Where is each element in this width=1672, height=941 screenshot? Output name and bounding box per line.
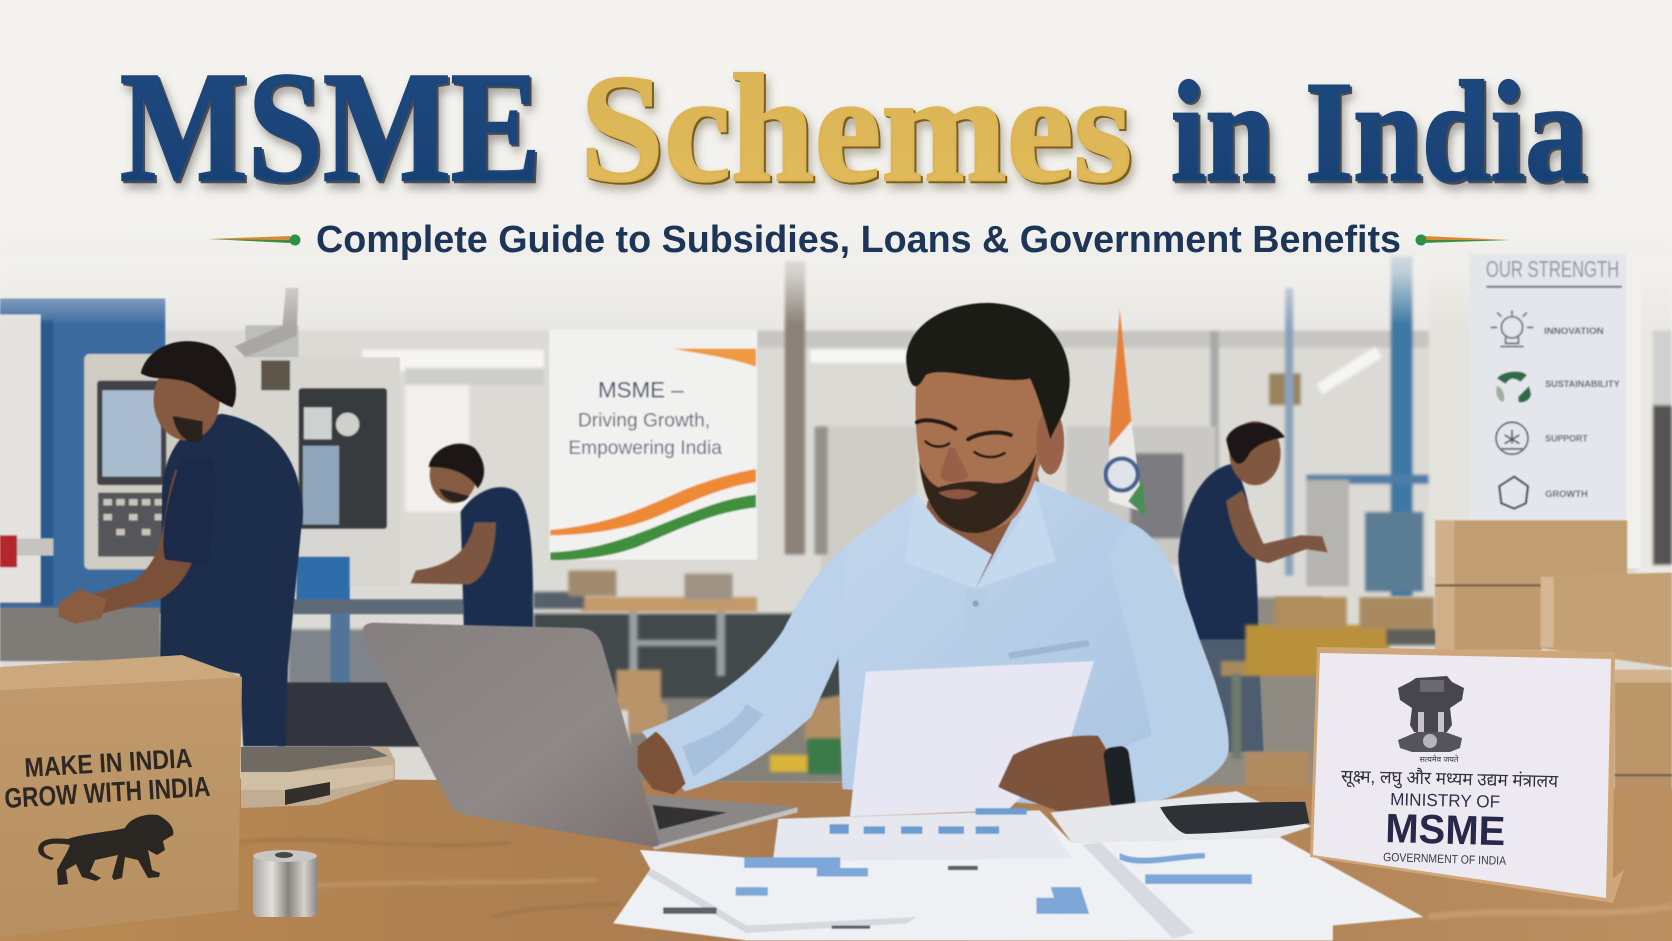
- collar: [904, 480, 1056, 589]
- title word: MSME: MSME: [120, 40, 541, 215]
- metal cylinder: [253, 850, 317, 917]
- shirt placket: [965, 589, 986, 682]
- hair: [906, 303, 1070, 439]
- sleeve shadow: [682, 704, 763, 776]
- title: [120, 40, 1587, 215]
- sign ministry of: MINISTRY OF: [1390, 789, 1500, 812]
- stacked cartons: [1435, 520, 1672, 891]
- banner: our strength: [1469, 254, 1641, 568]
- right tricolour accent: [1416, 234, 1510, 246]
- neck: [917, 469, 1056, 589]
- left machines: [0, 288, 464, 746]
- icon: national emblem: [1398, 676, 1464, 752]
- watch: [1102, 745, 1137, 812]
- desk: [0, 778, 1672, 941]
- banner: driving growth: Empowering India: [568, 438, 722, 459]
- box text line 1: MAKE IN INDIA: [24, 743, 193, 783]
- wood grain: [240, 839, 1672, 917]
- background tables and boxes: [533, 570, 1461, 792]
- box text line 2: GROW WITH INDIA: [4, 771, 211, 814]
- spread of chart papers: [613, 791, 1424, 940]
- torso: [838, 480, 1184, 810]
- left tricolour accent: [208, 234, 300, 246]
- left hand: [638, 731, 686, 794]
- banner: our strength: GROWTH: [1545, 489, 1588, 500]
- title words: in India: in India: [1171, 53, 1587, 212]
- banner: our strength: SUPPORT: [1545, 433, 1588, 444]
- right hand: [998, 735, 1117, 819]
- nose: [941, 448, 968, 482]
- title word: Schemes: Schemes: [580, 44, 1132, 214]
- shirt buttons: [972, 600, 979, 688]
- banner: driving growth: Driving Growth,: [578, 411, 710, 432]
- carton: make in india: [0, 655, 242, 937]
- shirt pocket: [1008, 640, 1090, 659]
- beard: [919, 453, 1036, 533]
- emblem motto: सत्यमेव जयते: [1420, 754, 1459, 764]
- right arm: [1098, 522, 1229, 813]
- pillar: [785, 261, 827, 554]
- laptop: [363, 623, 798, 850]
- icon: sustainability: [1496, 372, 1531, 402]
- icon: lion: [38, 815, 173, 885]
- left arm: [642, 544, 848, 791]
- sign: ministry of msme: [1310, 647, 1624, 903]
- icon: innovation bulb: [1491, 310, 1533, 347]
- man with document: [638, 303, 1229, 819]
- dark under-table band: [533, 613, 853, 698]
- banner: our strength: OUR STRENGTH: [1486, 256, 1619, 282]
- stacked notebooks: [241, 747, 395, 808]
- held document: [850, 661, 1094, 817]
- worker: centre: [411, 444, 533, 629]
- icon: support: [1496, 422, 1528, 454]
- banner: driving growth: MSME –: [598, 378, 684, 403]
- sign government of india: GOVERNMENT OF INDIA: [1383, 850, 1506, 868]
- eyebrows and eyes: [917, 420, 1011, 457]
- sign hindi line: सूक्ष्म, लघु और मध्यम उद्यम मंत्रालय: [1341, 765, 1559, 792]
- banner: our strength: INNOVATION: [1544, 326, 1604, 337]
- head: [916, 357, 1050, 531]
- sign msme: MSME: [1385, 805, 1506, 854]
- worker: right: [1178, 421, 1328, 752]
- indian flag: [1106, 309, 1145, 516]
- banner: driving growth: [549, 329, 757, 560]
- subtitle: Complete Guide to Subsidies, Loans & Government Benefits: [316, 219, 1401, 261]
- top fade overlay: [0, 0, 1672, 325]
- banner: our strength: SUSTAINABILITY: [1545, 379, 1620, 390]
- icon: growth: [1499, 477, 1528, 509]
- calculator: [1160, 802, 1309, 834]
- worker: far left: [59, 341, 303, 746]
